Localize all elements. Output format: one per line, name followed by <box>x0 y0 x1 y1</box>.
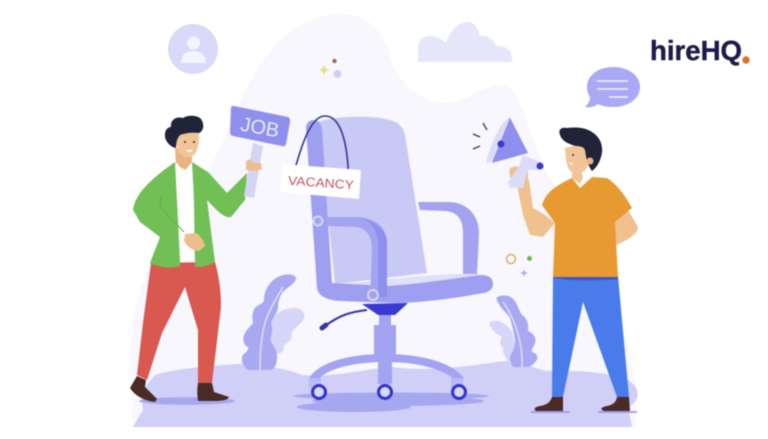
raised arm <box>516 180 555 237</box>
person: man with megaphone <box>473 117 638 412</box>
raised hand <box>246 159 262 171</box>
sound lines <box>473 123 487 149</box>
chair back cushion <box>318 117 427 284</box>
person: man holding job sign <box>130 106 290 405</box>
shoe shadow <box>139 397 235 405</box>
megaphone cone <box>486 117 528 163</box>
chair shadow <box>293 392 489 412</box>
right shoe <box>197 383 229 401</box>
job sign text: JOB <box>239 114 281 142</box>
hair <box>165 116 203 148</box>
decorative dots <box>319 59 342 78</box>
ear <box>586 158 594 164</box>
megaphone centre dot <box>498 140 504 148</box>
ground <box>133 361 638 427</box>
chair legs <box>312 358 461 381</box>
sign pole <box>244 143 263 198</box>
chair wheels <box>312 386 466 398</box>
chair base plate <box>362 303 408 315</box>
logo: hireHQ: hireHQ <box>650 35 742 66</box>
sign board <box>280 164 361 199</box>
blue trousers <box>552 276 629 397</box>
lower hand <box>184 233 205 251</box>
shirt shadow on waistband <box>553 277 618 280</box>
job sign board <box>230 106 290 146</box>
hand on megaphone <box>509 166 528 188</box>
left shoe <box>130 376 157 402</box>
chair rear armrest <box>418 202 479 275</box>
megaphone handle <box>508 155 542 188</box>
decorative ring, dot and star <box>506 254 532 277</box>
plant: left <box>242 274 304 370</box>
face details <box>568 154 574 165</box>
shoes <box>535 397 630 411</box>
chair front armrest <box>327 217 387 297</box>
neck and face <box>565 143 588 184</box>
shoe shadows <box>531 411 637 413</box>
background blob <box>130 14 637 427</box>
green jacket <box>133 162 247 267</box>
vacancy sign <box>280 116 361 199</box>
chair casters <box>309 378 463 388</box>
icon: user avatar <box>168 24 218 74</box>
chair arm inner edge <box>362 218 387 297</box>
face <box>176 129 199 157</box>
red trousers <box>137 262 221 383</box>
icon: speech bubble <box>585 67 640 107</box>
white shirt <box>176 162 194 262</box>
neck <box>175 148 192 172</box>
chair <box>293 117 493 412</box>
jacket fold <box>160 195 184 232</box>
chair column <box>374 315 396 384</box>
plant: right <box>489 295 537 367</box>
face details <box>184 141 195 152</box>
chair frame <box>306 120 493 303</box>
sign text: VACANCY <box>288 174 355 192</box>
chair seat top <box>335 274 481 292</box>
hair <box>559 127 602 171</box>
icon: cloud <box>418 22 512 62</box>
orange t-shirt <box>542 177 632 277</box>
megaphone cap <box>536 162 544 170</box>
megaphone <box>473 117 544 188</box>
chair gas lift lever <box>325 310 367 326</box>
back arm <box>612 210 638 245</box>
sign hanging wire <box>295 116 348 174</box>
chair bolts <box>314 216 378 300</box>
